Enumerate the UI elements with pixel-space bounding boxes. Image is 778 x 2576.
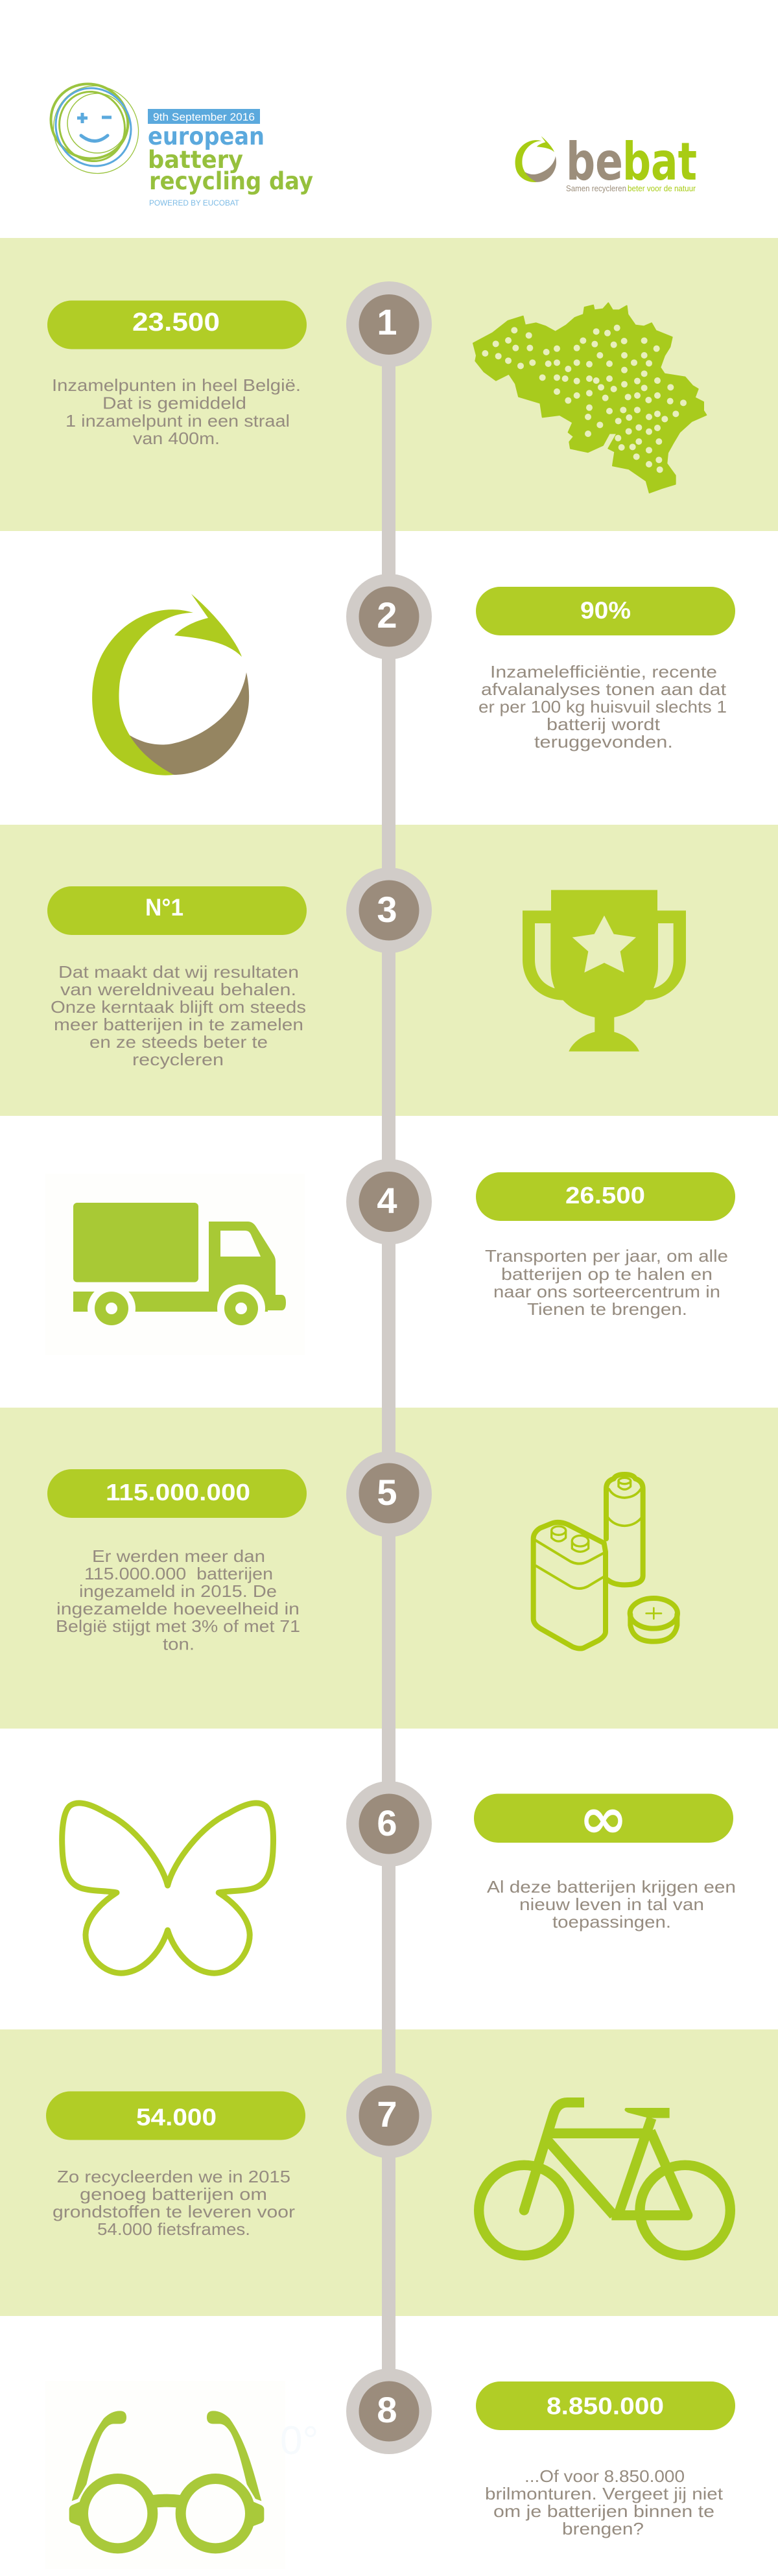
icon: butterfly bbox=[62, 1803, 273, 1973]
text block: Tienen te brengen. bbox=[527, 1299, 687, 1319]
logo wordmark bbox=[148, 123, 313, 195]
text block bbox=[51, 962, 306, 1069]
text block bbox=[478, 662, 727, 751]
text block: 115.000.000 batterijen bbox=[84, 1564, 273, 1583]
text block: afvalanalyses tonen aan dat bbox=[481, 679, 727, 699]
text block bbox=[52, 375, 301, 448]
pill: 54.000 bbox=[46, 2092, 305, 2140]
logo wordmark: european bbox=[148, 123, 265, 150]
pill: 115.000.000 bbox=[47, 1469, 307, 1518]
text block: Zo recycleerden we in 2015 bbox=[57, 2167, 290, 2186]
date label: 9th September 2016 bbox=[153, 111, 255, 123]
number badge 1: 1 bbox=[377, 301, 397, 342]
number badge 1 bbox=[346, 281, 432, 367]
pill: N°1: N°1 bbox=[145, 894, 183, 921]
text block: Onze kerntaak blijft om steeds bbox=[51, 997, 306, 1017]
logo: bebat bbox=[515, 132, 697, 193]
pill: 8.850.000: 8.850.000 bbox=[547, 2393, 664, 2420]
bebat tagline bbox=[566, 183, 696, 193]
number badge 4: 4 bbox=[377, 1180, 397, 1221]
text block: 1 inzamelpunt in een straal bbox=[65, 411, 290, 431]
faint stray mark: 0° bbox=[280, 2418, 318, 2463]
text block: brilmonturen. Vergeet jij niet bbox=[485, 2484, 724, 2503]
pill: 90%: 90% bbox=[580, 597, 631, 624]
text block: om je batterijen binnen te bbox=[493, 2501, 714, 2521]
bebat tagline: Samen recycleren bbox=[566, 183, 626, 193]
text block: naar ons sorteercentrum in bbox=[493, 1282, 720, 1301]
icon: glasses bbox=[45, 2381, 285, 2569]
pill: 115.000.000: 115.000.000 bbox=[106, 1479, 250, 1506]
number badge 8: 8 bbox=[377, 2389, 397, 2430]
text block: van 400m. bbox=[133, 429, 220, 448]
number badge 4 bbox=[346, 1159, 432, 1245]
text block bbox=[53, 2167, 295, 2239]
text block bbox=[485, 1246, 728, 1319]
text block: en ze steeds beter te bbox=[89, 1032, 268, 1052]
pill: 26.500: 26.500 bbox=[565, 1182, 645, 1209]
text block: grondstoffen te leveren voor bbox=[53, 2202, 295, 2221]
logo wordmark: recycling day bbox=[149, 167, 313, 195]
icon: bicycle bbox=[479, 2103, 730, 2256]
pill: infinity: ∞ bbox=[579, 1786, 628, 1851]
pill: infinity bbox=[474, 1786, 733, 1851]
text block: genoeg batterijen om bbox=[80, 2184, 267, 2204]
number badge 3: 3 bbox=[377, 889, 397, 930]
text block: ...Of voor 8.850.000 bbox=[525, 2466, 685, 2486]
text block: van wereldniveau behalen. bbox=[60, 980, 296, 999]
panel: 3 - N°1 bbox=[47, 868, 686, 1069]
icon: bebat recycle arrow small bbox=[515, 136, 556, 182]
icon: batteries bbox=[534, 1474, 678, 1649]
text block: ingezameld in 2015. De bbox=[79, 1581, 277, 1601]
panel: 7 - 54.000 bbox=[46, 2072, 730, 2256]
bebat wordmark: bat bbox=[622, 132, 697, 192]
panel: 2 - 90% bbox=[92, 574, 735, 775]
pill: 90% bbox=[476, 587, 735, 635]
text block: 54.000 fietsframes. bbox=[97, 2219, 250, 2239]
text block: ingezamelde hoeveelheid in bbox=[56, 1599, 300, 1618]
logo wordmark: battery bbox=[148, 146, 243, 174]
number badge 2 bbox=[346, 574, 432, 659]
text block: Transporten per jaar, om alle bbox=[485, 1246, 728, 1266]
text block: Dat maakt dat wij resultaten bbox=[58, 962, 299, 982]
icon: truck bbox=[45, 1174, 305, 1355]
pill: 26.500 bbox=[476, 1172, 735, 1221]
timeline line bbox=[382, 324, 395, 2411]
number badge 6: 6 bbox=[377, 1802, 397, 1843]
pill: 23.500 bbox=[47, 301, 307, 349]
logo: European Battery Recycling Day bbox=[39, 71, 313, 207]
panel: 6 - infinity bbox=[62, 1781, 736, 1973]
number badge 7 bbox=[346, 2072, 432, 2158]
text block: brengen? bbox=[562, 2519, 644, 2538]
pill: N°1 bbox=[47, 886, 307, 935]
text block: ton. bbox=[163, 1634, 194, 1653]
text block: meer batterijen in te zamelen bbox=[54, 1015, 303, 1034]
number badge 3 bbox=[346, 868, 432, 953]
icon: trophy bbox=[523, 890, 686, 1052]
panel: 8 - 8.850.000 bbox=[45, 2369, 735, 2569]
text block bbox=[485, 2466, 724, 2538]
icon: scribble smiley bbox=[39, 71, 153, 187]
text block: België stijgt met 3% of met 71 bbox=[56, 1616, 300, 1636]
number badge 6 bbox=[346, 1781, 432, 1867]
pill: 23.500: 23.500 bbox=[132, 308, 220, 337]
bebat wordmark: be bbox=[566, 132, 623, 192]
text block: batterij wordt bbox=[547, 715, 661, 734]
panel: 4 - 26.500 bbox=[45, 1159, 735, 1355]
powered by: POWERED BY EUCOBAT bbox=[149, 200, 239, 207]
bebat wordmark bbox=[566, 132, 697, 192]
number badge 5: 5 bbox=[377, 1472, 397, 1513]
text block: Inzamelpunten in heel België. bbox=[52, 375, 301, 395]
icon: map of Belgium with dots bbox=[473, 303, 706, 493]
text block: Dat is gemiddeld bbox=[102, 393, 246, 412]
text block: batterijen op te halen en bbox=[501, 1264, 713, 1284]
text block: er per 100 kg huisvuil slechts 1 bbox=[478, 697, 727, 716]
number badge 5 bbox=[346, 1451, 432, 1537]
number badge 8 bbox=[346, 2369, 432, 2454]
pill: 8.850.000 bbox=[476, 2381, 735, 2430]
number badge 2: 2 bbox=[377, 595, 397, 635]
text block bbox=[487, 1877, 736, 1932]
bebat tagline: beter voor de natuur bbox=[628, 183, 696, 193]
text block: toepassingen. bbox=[552, 1912, 671, 1932]
text block: Er werden meer dan bbox=[92, 1546, 265, 1566]
panel: 5 - 115.000.000 bbox=[47, 1451, 678, 1653]
number badge 7: 7 bbox=[377, 2094, 397, 2134]
text block: nieuw leven in tal van bbox=[519, 1895, 704, 1914]
text block: Inzamelefficiëntie, recente bbox=[490, 662, 717, 681]
text block: recycleren bbox=[132, 1050, 224, 1069]
text block bbox=[56, 1546, 300, 1653]
text block: Al deze batterijen krijgen een bbox=[487, 1877, 736, 1897]
panel: 1 - 23.500 bbox=[47, 281, 706, 493]
pill: 54.000: 54.000 bbox=[136, 2104, 217, 2131]
icon: recycle arrow bbox=[92, 594, 249, 775]
text block: teruggevonden. bbox=[534, 732, 673, 751]
